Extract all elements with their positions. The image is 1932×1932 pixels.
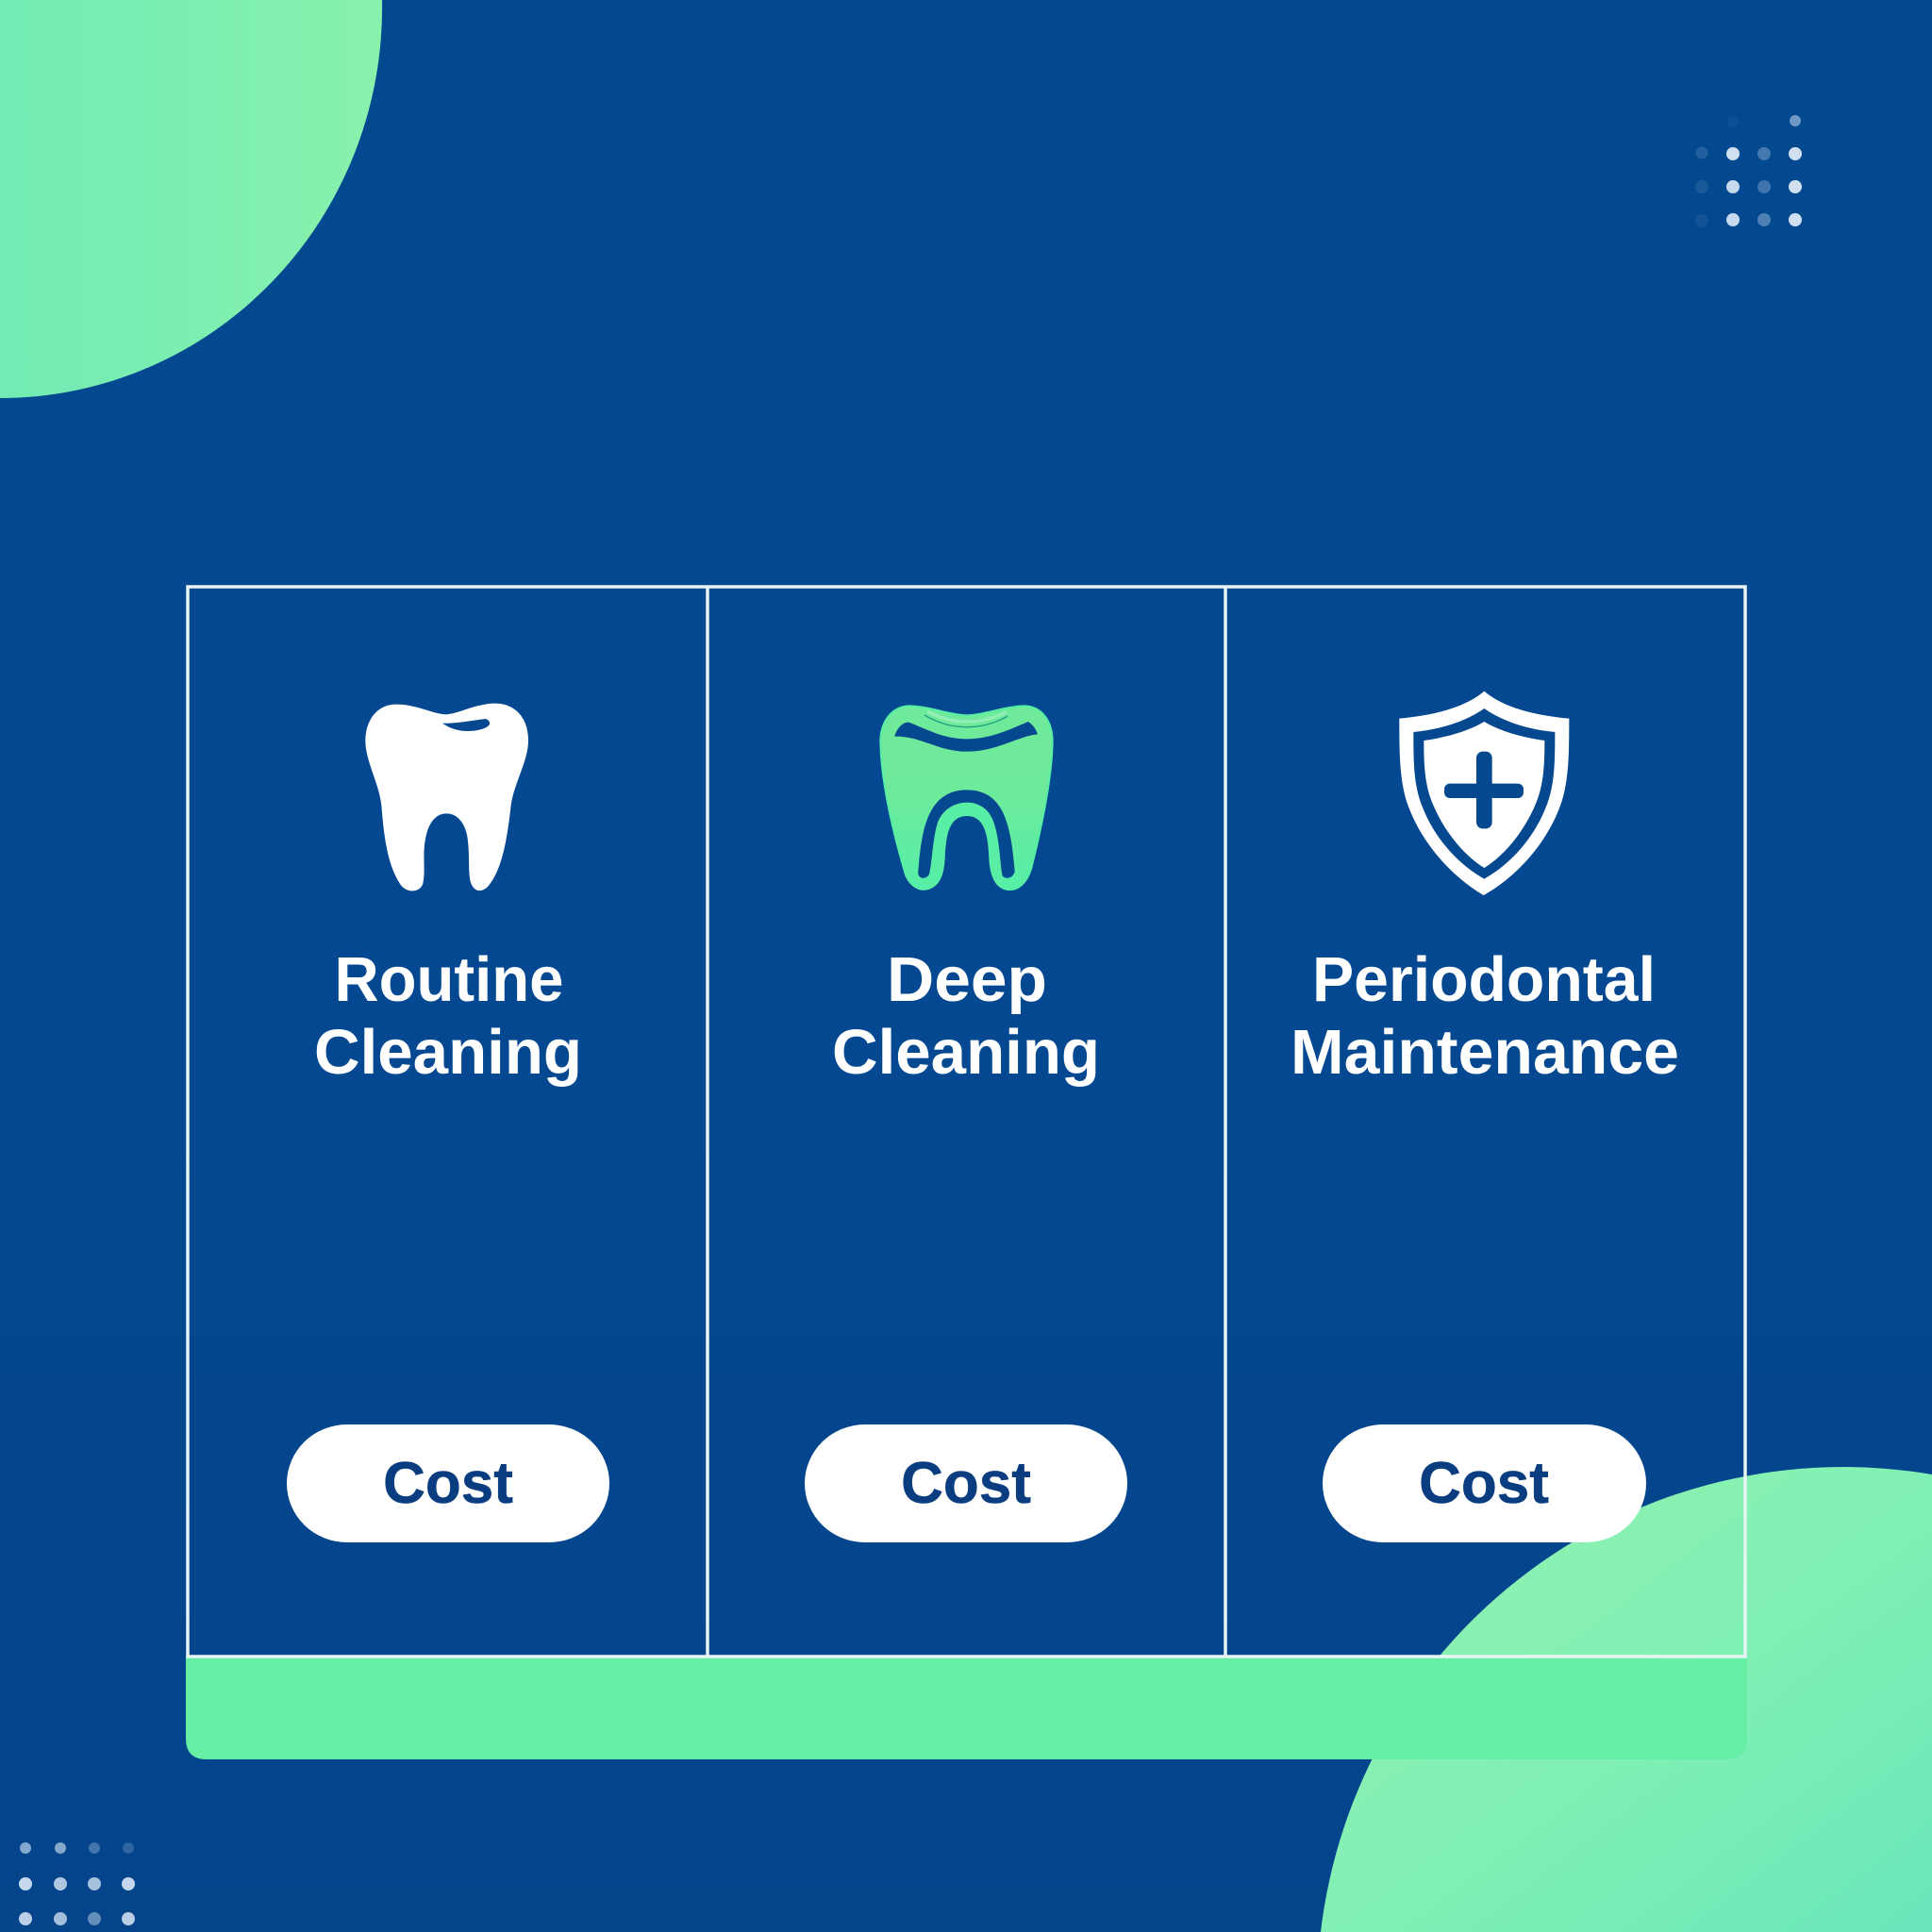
icon: shield with plus xyxy=(1399,691,1569,895)
heading: periodontal maintenance: Periodontal xyxy=(1312,944,1656,1015)
comparison table frame xyxy=(188,587,1745,1657)
panel: routine cleaning xyxy=(287,704,609,1542)
heading: routine cleaning: Routine xyxy=(334,944,564,1015)
cost pill xyxy=(1323,1424,1646,1542)
cost pill xyxy=(287,1424,609,1542)
heading: periodontal maintenance: Maintenance xyxy=(1291,1017,1679,1088)
heading: periodontal maintenance xyxy=(1291,944,1679,1088)
cost pill: Cost xyxy=(1419,1451,1549,1516)
panel: periodontal maintenance xyxy=(1291,691,1679,1542)
heading: deep cleaning: Deep xyxy=(887,944,1047,1015)
dot grid: top right xyxy=(1695,115,1802,227)
icon: green tooth xyxy=(880,706,1053,890)
dot grid: bottom left xyxy=(19,1842,135,1925)
panel: deep cleaning xyxy=(805,706,1127,1542)
cost pill xyxy=(805,1424,1127,1542)
heading: routine cleaning xyxy=(314,944,582,1088)
decorative circle: bottom right xyxy=(1321,1467,1932,1932)
green footer bar xyxy=(186,1656,1747,1759)
cost pill: Cost xyxy=(901,1451,1031,1516)
heading: routine cleaning: Cleaning xyxy=(314,1017,582,1088)
decorative circle: top left xyxy=(0,0,382,398)
icon: white tooth xyxy=(365,704,528,891)
heading: deep cleaning: Cleaning xyxy=(832,1017,1100,1088)
heading: deep cleaning xyxy=(832,944,1100,1088)
cost pill: Cost xyxy=(383,1451,513,1516)
